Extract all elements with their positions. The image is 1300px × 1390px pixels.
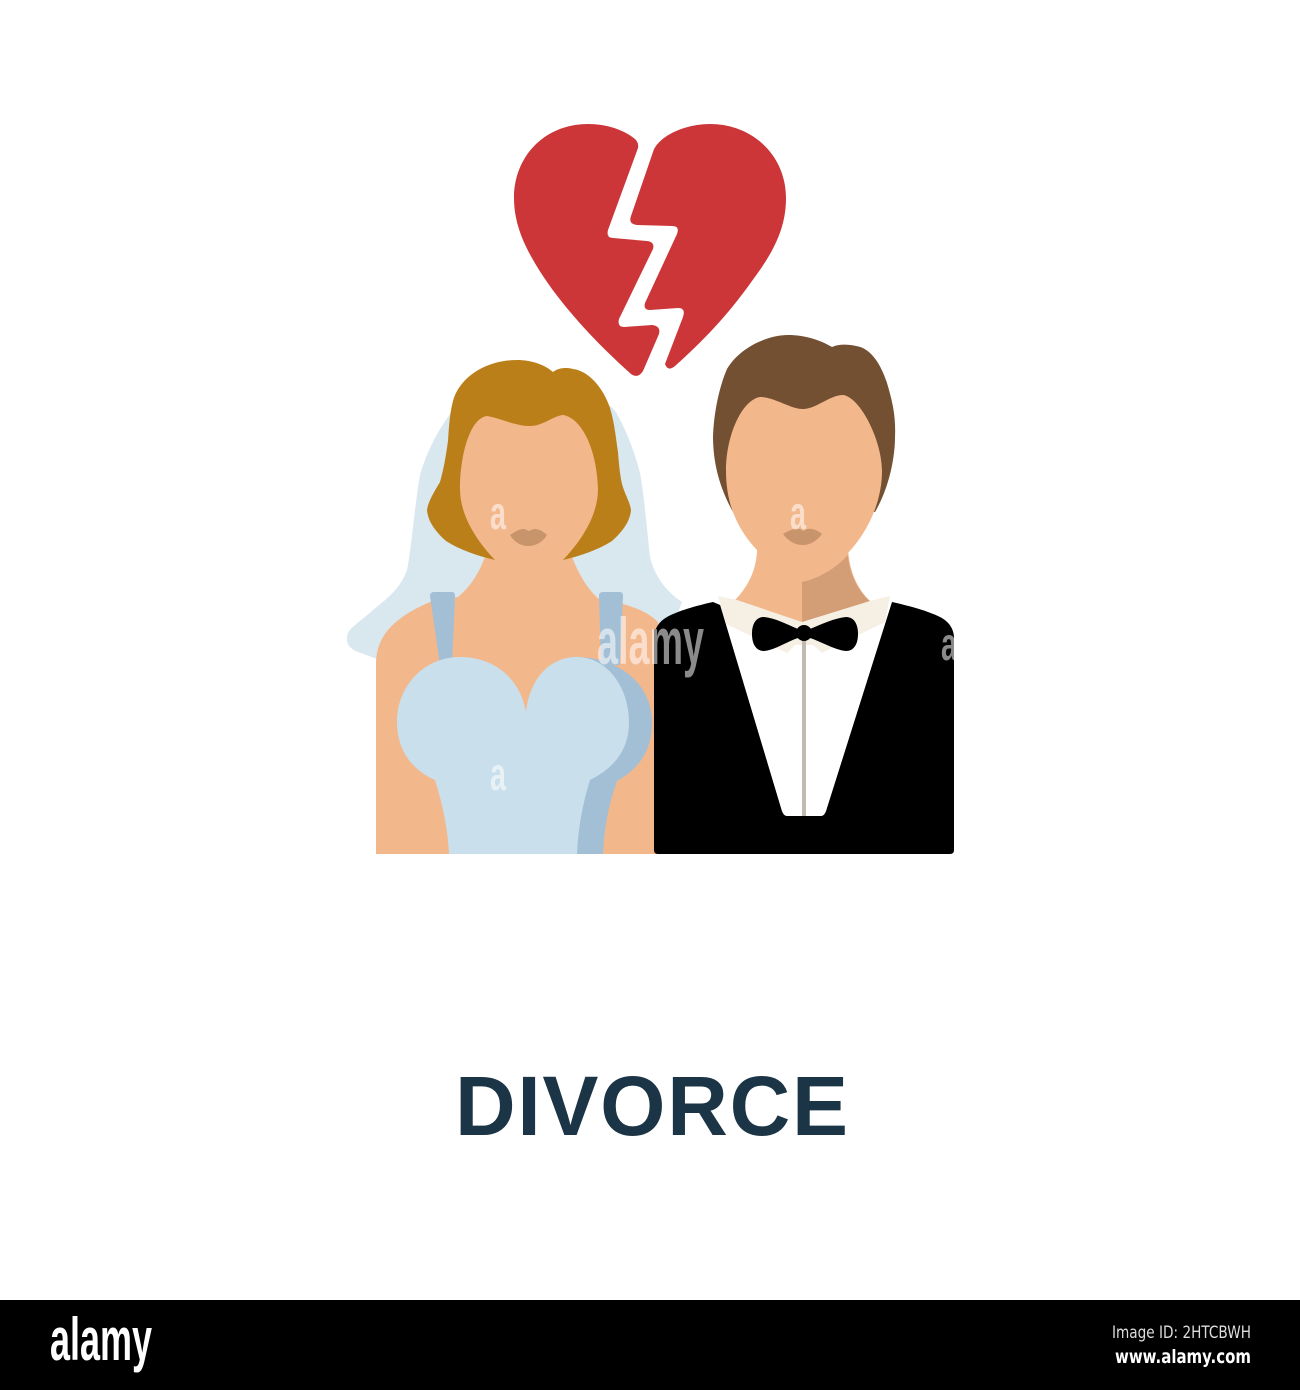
groom neck <box>735 545 870 625</box>
right heart half <box>630 124 786 369</box>
watermark letter a on groom face: a <box>790 487 806 539</box>
footer url: www.alamy.com <box>1115 1346 1251 1368</box>
watermark letter a on jacket: a <box>941 618 957 670</box>
groom face <box>726 395 882 582</box>
watermark letter a on dress: a <box>490 748 506 800</box>
bridal veil <box>347 388 682 660</box>
watermark: alamy <box>490 487 957 800</box>
bow left wing <box>752 617 798 651</box>
groom lips <box>783 529 822 545</box>
bow right wing <box>810 617 858 651</box>
groom hair <box>713 335 895 512</box>
image id: Image ID: 2HTCBWH <box>1112 1323 1251 1343</box>
bow knot <box>796 625 812 641</box>
bow tie <box>752 617 858 651</box>
shirt collar <box>718 596 890 653</box>
shirt front <box>718 598 892 816</box>
footer logo: alamy <box>50 1306 152 1373</box>
bride body and neck <box>376 557 658 854</box>
neck shadow <box>802 555 870 625</box>
figure: groom <box>654 335 954 854</box>
shirt placket <box>802 636 806 816</box>
tuxedo jacket <box>654 602 954 854</box>
bride hair <box>427 360 631 560</box>
bride face <box>460 415 598 560</box>
figure: bride <box>347 360 682 854</box>
dress shaded side <box>570 657 652 854</box>
dress right strap <box>599 592 623 665</box>
icon: broken heart <box>514 124 786 376</box>
bride lips <box>510 529 547 546</box>
watermark letter a on bride face: a <box>490 487 506 539</box>
dress left strap <box>430 592 455 665</box>
title: DIVORCE <box>455 1059 848 1153</box>
watermark word on jacket: alamy <box>597 604 704 678</box>
wedding dress <box>397 657 629 854</box>
left heart half <box>514 124 659 376</box>
watermark word on bride: alamy <box>597 604 704 678</box>
footer bar <box>0 1300 1300 1390</box>
